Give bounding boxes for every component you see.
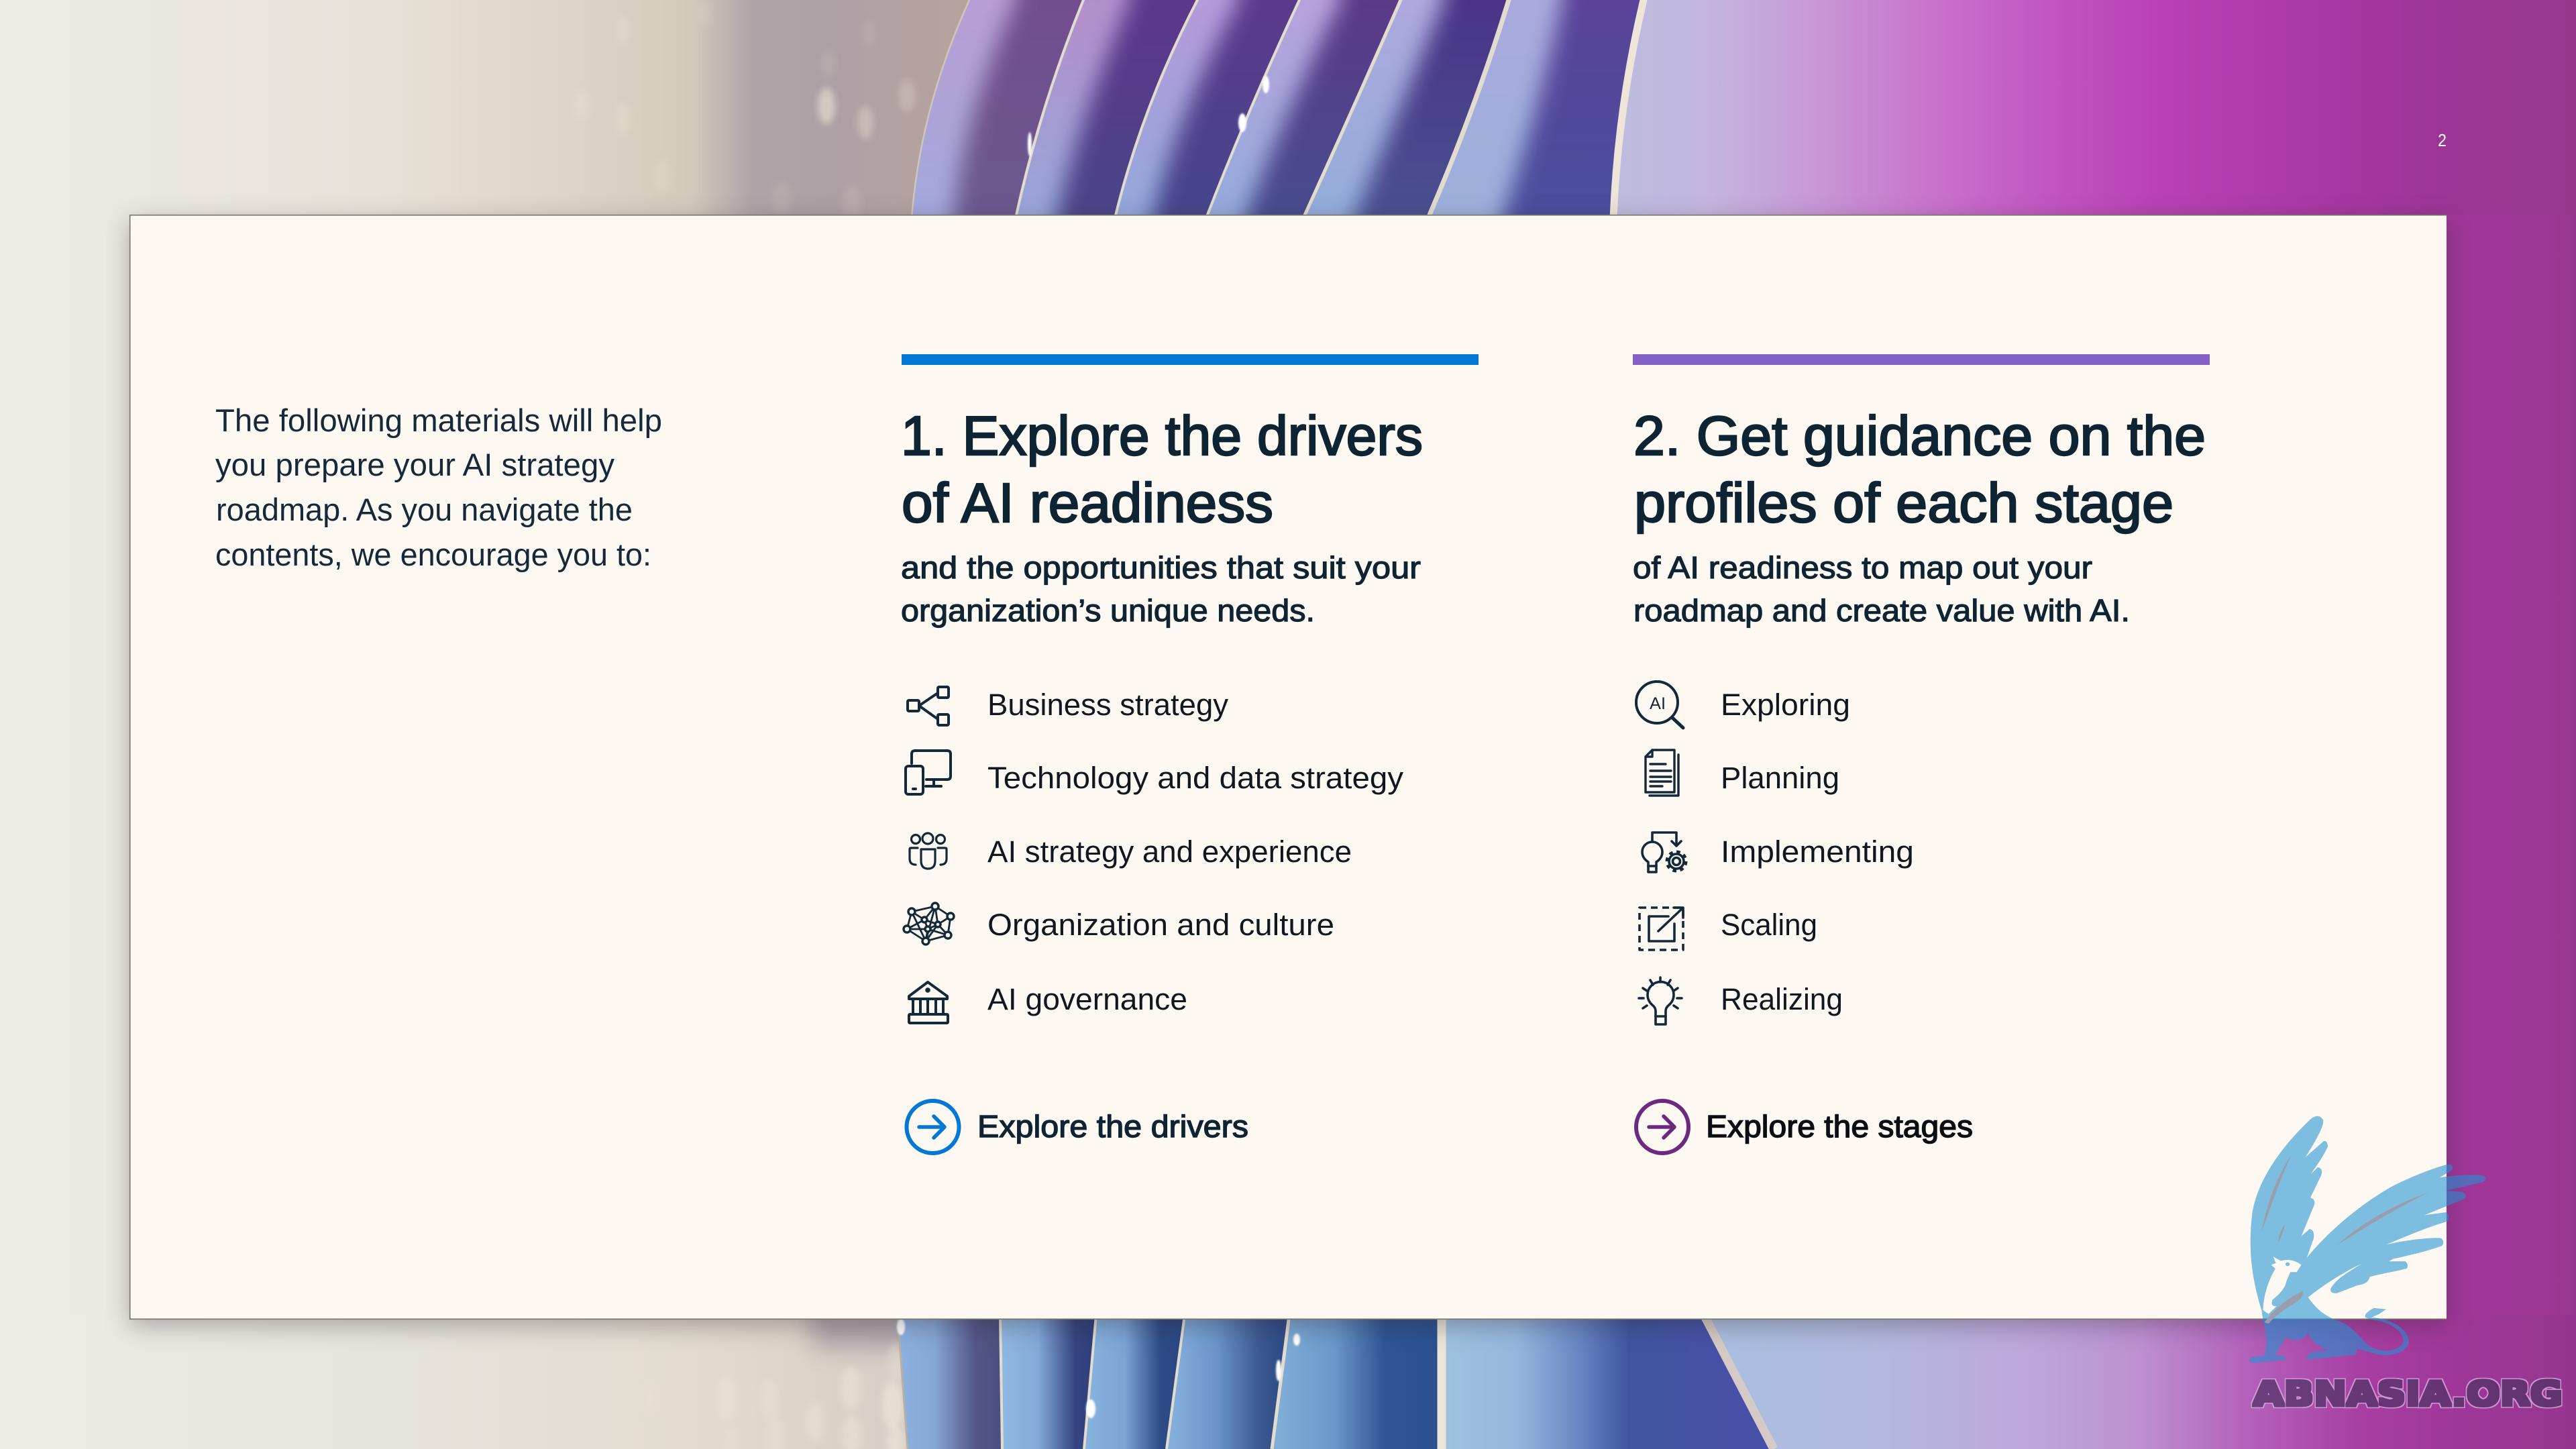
accent bar blue: [902, 354, 1479, 365]
icon: technology devices: [906, 751, 951, 794]
watermark text: ABNASIA.ORG: [2253, 1375, 2563, 1413]
intro text: [215, 402, 662, 572]
panel: column 2 stage profiles: [1633, 354, 2210, 1153]
icon: exploring ai magnifier: AI: [1650, 694, 1666, 713]
heading 1: of AI readiness: [902, 472, 1273, 534]
icon: organization network: [904, 903, 954, 945]
top curved stripes: [911, 0, 1648, 215]
intro text: contents, we encourage you to:: [215, 537, 651, 572]
heading 1: [901, 405, 1423, 534]
icon: realizing light bulb: [1639, 977, 1682, 1024]
intro text: roadmap. As you navigate the: [216, 492, 633, 527]
panel: content card: [129, 215, 2447, 1320]
label: organization and culture: Organization and culture: [987, 908, 1334, 942]
subheading 1: organization’s unique needs.: [901, 593, 1315, 628]
icon: governance bank: [909, 982, 948, 1023]
subheading 2: of AI readiness to map out your: [1633, 550, 2092, 585]
icon: purple arrow circle: [1636, 1101, 1688, 1153]
label: ai governance: AI governance: [987, 982, 1187, 1016]
label: implementing: Implementing: [1721, 835, 1914, 869]
heading 2: 2. Get guidance on the: [1633, 405, 2206, 467]
label: ai strategy and experience: AI strategy and experience: [987, 835, 1352, 869]
label: business strategy: Business strategy: [987, 688, 1228, 722]
subheading 1: and the opportunities that suit your: [901, 550, 1421, 585]
label: planning: Planning: [1721, 761, 1839, 795]
watermark griffin logo: [2249, 1116, 2485, 1364]
label: exploring: Exploring: [1721, 688, 1850, 722]
heading 1: 1. Explore the drivers: [901, 405, 1423, 467]
icon: people group: [910, 833, 947, 869]
icon: scaling dashed box arrow: [1640, 908, 1683, 950]
link: explore the stages: Explore the stages: [1706, 1109, 1973, 1144]
label: realizing: Realizing: [1721, 982, 1843, 1016]
accent bar purple: [1633, 354, 2210, 365]
icon: implementing bulb and gear: [1642, 833, 1686, 872]
bottom vertical stripes and disc: [897, 1315, 2576, 1449]
icon: planning document: [1646, 750, 1678, 796]
heading 2: [1633, 405, 2206, 534]
intro text: you prepare your AI strategy: [215, 447, 615, 482]
icon: exploring ai magnifier: [1636, 682, 1683, 728]
subheading 2: roadmap and create value with AI.: [1633, 593, 2130, 628]
icon: business strategy share nodes: [908, 687, 949, 725]
panel: column 1 explore the drivers: [901, 354, 1479, 1153]
link: explore the drivers: Explore the drivers: [977, 1109, 1248, 1144]
subheading 1: [901, 550, 1421, 628]
page number: 2: [2438, 130, 2447, 150]
intro text: The following materials will help: [215, 402, 662, 438]
label: technology and data strategy: Technology and data strategy: [987, 761, 1404, 795]
label: scaling: Scaling: [1721, 908, 1817, 942]
subheading 2: [1633, 550, 2130, 628]
icon: blue arrow circle: [907, 1101, 959, 1153]
heading 2: profiles of each stage: [1634, 472, 2174, 534]
